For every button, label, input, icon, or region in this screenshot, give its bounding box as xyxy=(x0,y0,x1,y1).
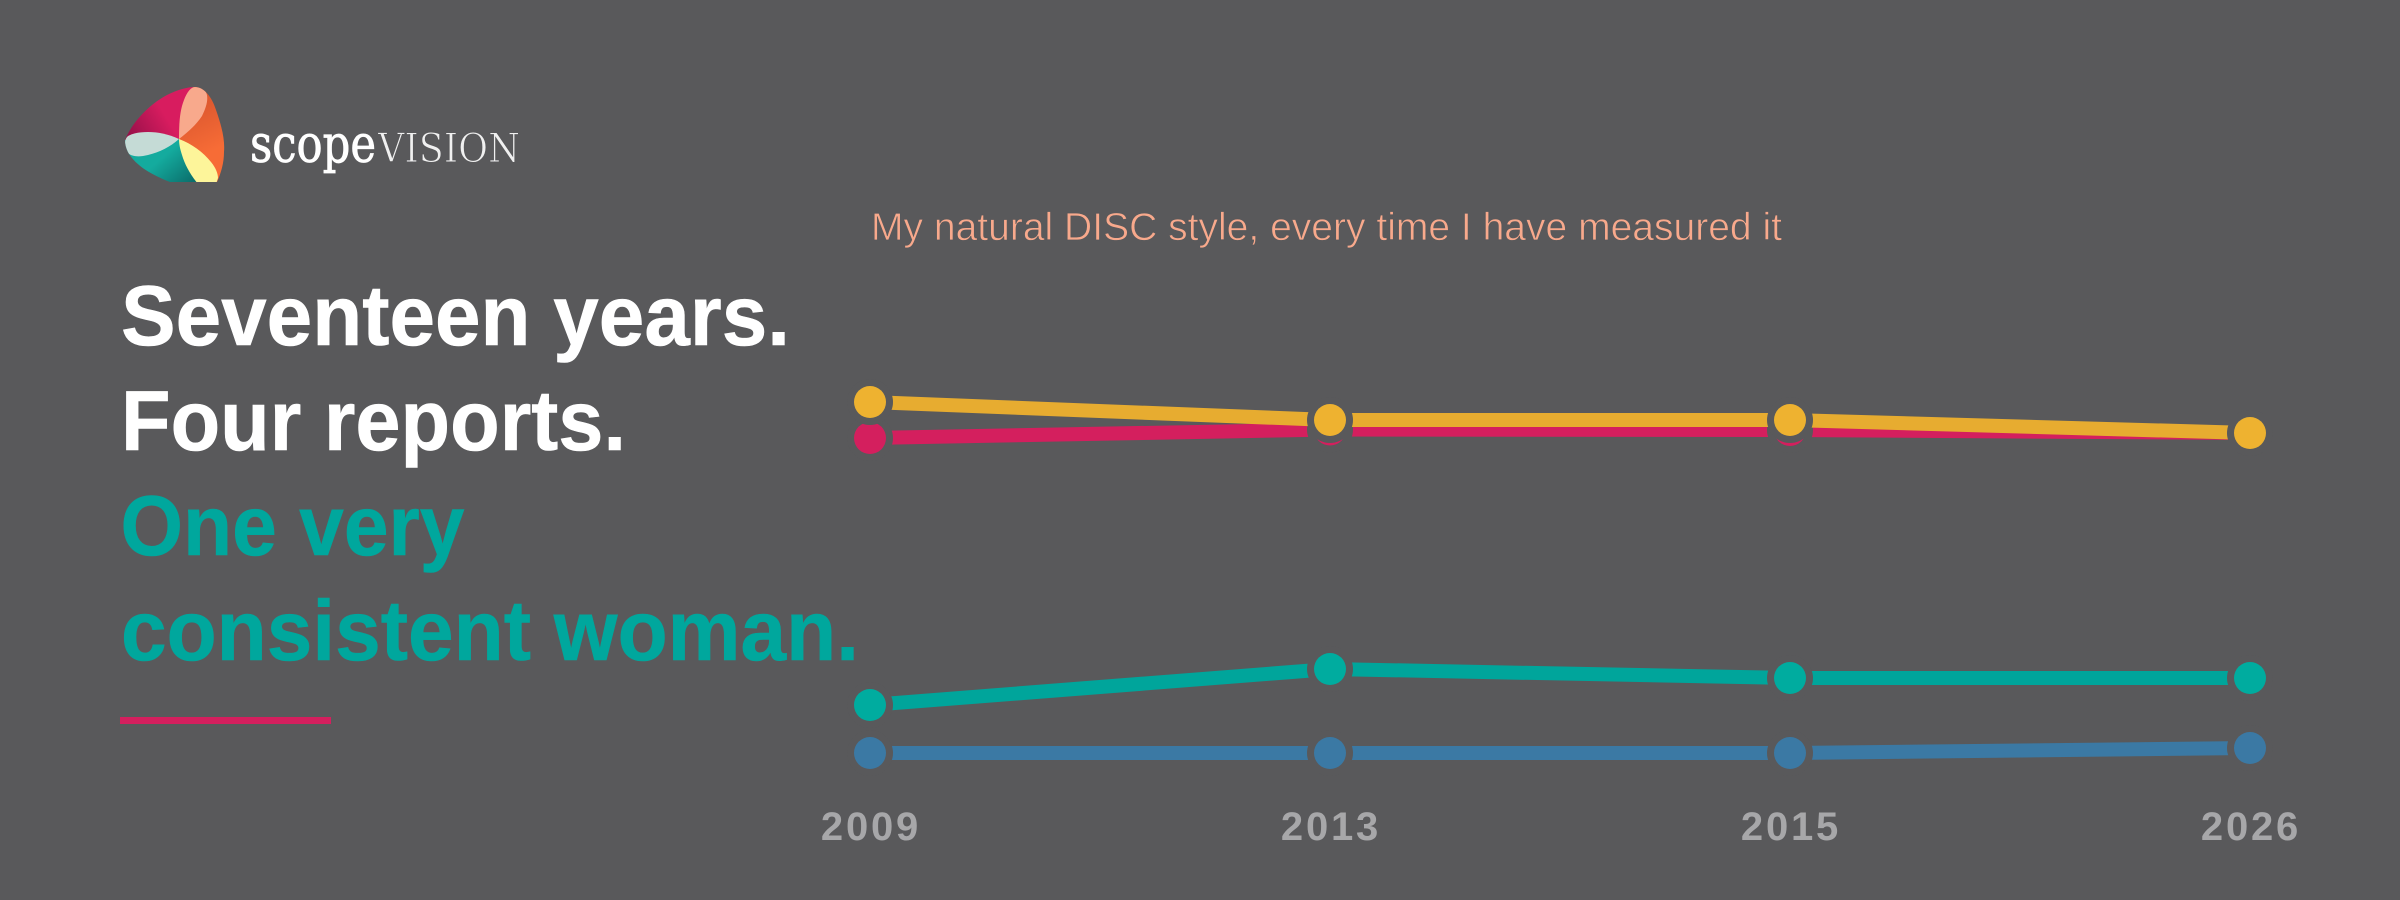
series: red (D) xyxy=(847,406,2273,461)
title xyxy=(120,269,859,679)
series: blue (C) xyxy=(847,725,2273,776)
infographic canvas xyxy=(120,87,2297,840)
logo: scopeVISION xyxy=(125,87,518,182)
x-axis year labels: 2026 xyxy=(2201,805,2301,849)
x-axis year labels: 2009 xyxy=(821,805,921,849)
title line: Seventeen years.: Seventeen years. xyxy=(121,269,790,364)
series: yellow (I) xyxy=(847,379,2273,456)
title line: One very: One very xyxy=(120,479,464,574)
series: teal (S) xyxy=(847,646,2273,728)
chart subtitle: My natural DISC style, every time I have measured it xyxy=(871,206,1782,249)
title line: Four reports.: Four reports. xyxy=(121,374,626,469)
icon: tri-petal logo mark xyxy=(125,87,224,182)
x-axis year labels xyxy=(821,805,2301,849)
x-axis year labels: 2013 xyxy=(1281,805,1381,849)
accent rule under title xyxy=(120,717,331,724)
logo wordmark: VISION: VISION xyxy=(377,126,520,172)
logo wordmark: scope: scope xyxy=(250,115,376,175)
line chart: DISC style by year xyxy=(821,379,2301,849)
title line: consistent woman.: consistent woman. xyxy=(121,584,859,679)
x-axis year labels: 2015 xyxy=(1741,805,1841,849)
